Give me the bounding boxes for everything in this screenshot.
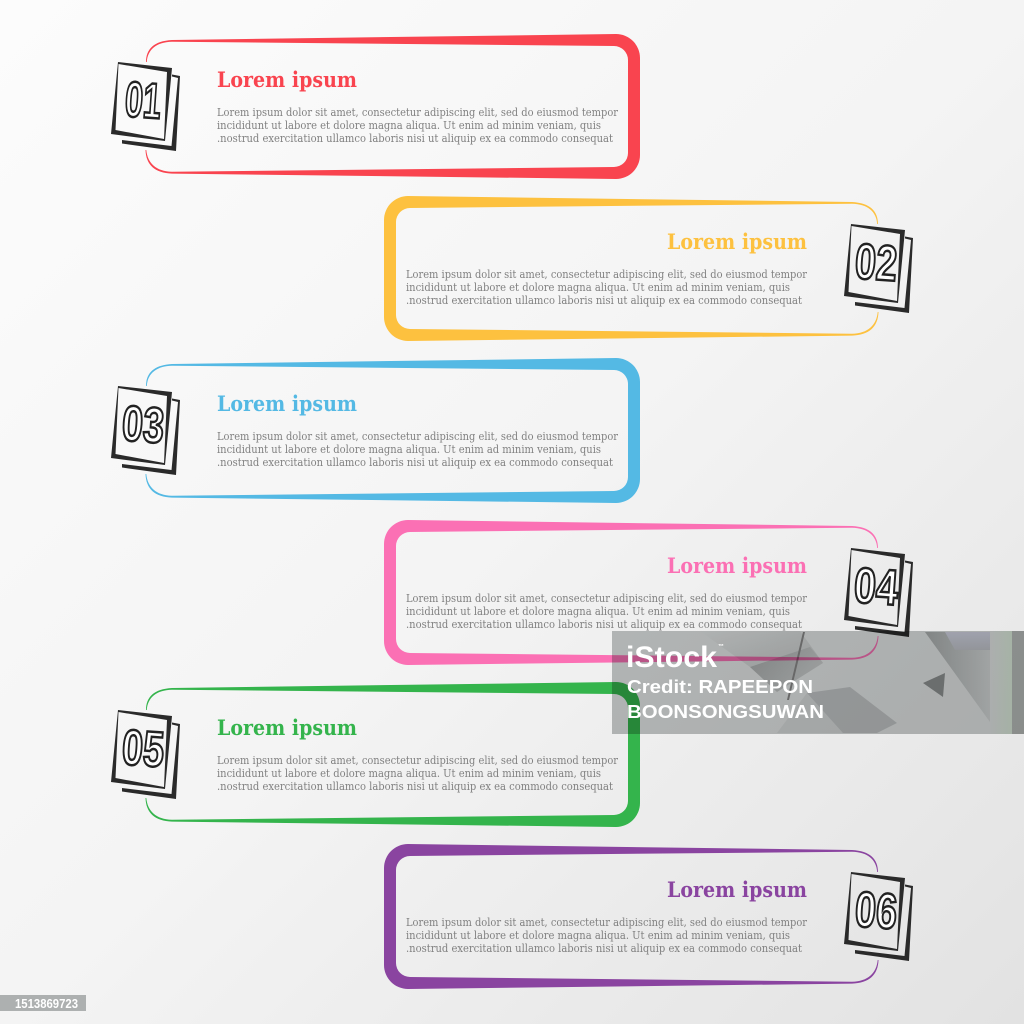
icon: number 01 xyxy=(111,62,180,151)
text block: Lorem ipsum dolor sit amet, consectetur adipiscing elit, sed do eiusmod tempor xyxy=(217,430,619,443)
frame: pink xyxy=(384,520,878,665)
panel: step 06 xyxy=(384,844,913,989)
image id tag: 1513869723 xyxy=(15,997,78,1011)
text block xyxy=(406,916,808,955)
text block: Lorem ipsum dolor sit amet, consectetur adipiscing elit, sed do eiusmod tempor xyxy=(217,754,619,767)
heading: Lorem ipsum xyxy=(667,230,807,255)
watermark: iStock credit: ™ xyxy=(718,643,724,650)
text block: Lorem ipsum dolor sit amet, consectetur adipiscing elit, sed do eiusmod tempor xyxy=(406,268,808,281)
heading: Lorem ipsum xyxy=(217,68,357,93)
text block: incididunt ut labore et dolore magna aliqua. Ut enim ad minim veniam, quis xyxy=(406,929,790,942)
frame: green xyxy=(146,682,640,827)
watermark: iStock credit xyxy=(612,631,1024,734)
heading: Lorem ipsum xyxy=(667,878,807,903)
text block xyxy=(217,754,619,793)
icon: number 02 xyxy=(844,224,913,313)
watermark: iStock credit: iStock xyxy=(626,641,717,674)
frame: blue xyxy=(146,358,640,503)
icon: number 05 xyxy=(111,710,180,799)
watermark: iStock credit: BOONSONGSUWAN xyxy=(627,701,824,722)
icon: number 02: 02 xyxy=(853,233,899,292)
panel: step 02 xyxy=(384,196,913,341)
text block: .nostrud exercitation ullamco laboris nisi ut aliquip ex ea commodo consequat xyxy=(406,294,803,307)
panel: step 04 xyxy=(384,520,913,665)
panel: step 01 xyxy=(111,34,640,179)
text block xyxy=(406,268,808,307)
icon: number 04 xyxy=(844,548,913,637)
text block xyxy=(406,592,808,631)
text block: incididunt ut labore et dolore magna aliqua. Ut enim ad minim veniam, quis xyxy=(406,281,790,294)
text block: .nostrud exercitation ullamco laboris nisi ut aliquip ex ea commodo consequat xyxy=(406,618,803,631)
heading: Lorem ipsum xyxy=(217,716,357,741)
text block xyxy=(217,430,619,469)
text block: .nostrud exercitation ullamco laboris nisi ut aliquip ex ea commodo consequat xyxy=(217,132,614,145)
heading: Lorem ipsum xyxy=(217,392,357,417)
icon: number 04: 04 xyxy=(852,557,900,616)
text block: incididunt ut labore et dolore magna aliqua. Ut enim ad minim veniam, quis xyxy=(406,605,790,618)
watermark: iStock credit: Credit: RAPEEPON xyxy=(627,676,813,697)
frame: yellow xyxy=(384,196,878,341)
text block: incididunt ut labore et dolore magna aliqua. Ut enim ad minim veniam, quis xyxy=(217,119,601,132)
text block: Lorem ipsum dolor sit amet, consectetur adipiscing elit, sed do eiusmod tempor xyxy=(217,106,619,119)
heading: Lorem ipsum xyxy=(667,554,807,579)
icon: number 03 xyxy=(111,386,180,475)
icon: number 05: 05 xyxy=(120,719,166,778)
frame: purple xyxy=(384,844,878,989)
icon: number 03: 03 xyxy=(120,395,166,454)
frame: red xyxy=(146,34,640,179)
text block xyxy=(217,106,619,145)
text block: .nostrud exercitation ullamco laboris nisi ut aliquip ex ea commodo consequat xyxy=(217,780,614,793)
icon: number 01: 01 xyxy=(123,71,163,129)
text block: incididunt ut labore et dolore magna aliqua. Ut enim ad minim veniam, quis xyxy=(217,767,601,780)
text block: .nostrud exercitation ullamco laboris nisi ut aliquip ex ea commodo consequat xyxy=(217,456,614,469)
text block: .nostrud exercitation ullamco laboris nisi ut aliquip ex ea commodo consequat xyxy=(406,942,803,955)
text block: incididunt ut labore et dolore magna aliqua. Ut enim ad minim veniam, quis xyxy=(217,443,601,456)
text block: Lorem ipsum dolor sit amet, consectetur adipiscing elit, sed do eiusmod tempor xyxy=(406,916,808,929)
icon: number 06: 06 xyxy=(853,881,899,940)
panel: step 03 xyxy=(111,358,640,503)
panel: step 05 xyxy=(111,682,640,827)
text block: Lorem ipsum dolor sit amet, consectetur adipiscing elit, sed do eiusmod tempor xyxy=(406,592,808,605)
icon: number 06 xyxy=(844,872,913,961)
